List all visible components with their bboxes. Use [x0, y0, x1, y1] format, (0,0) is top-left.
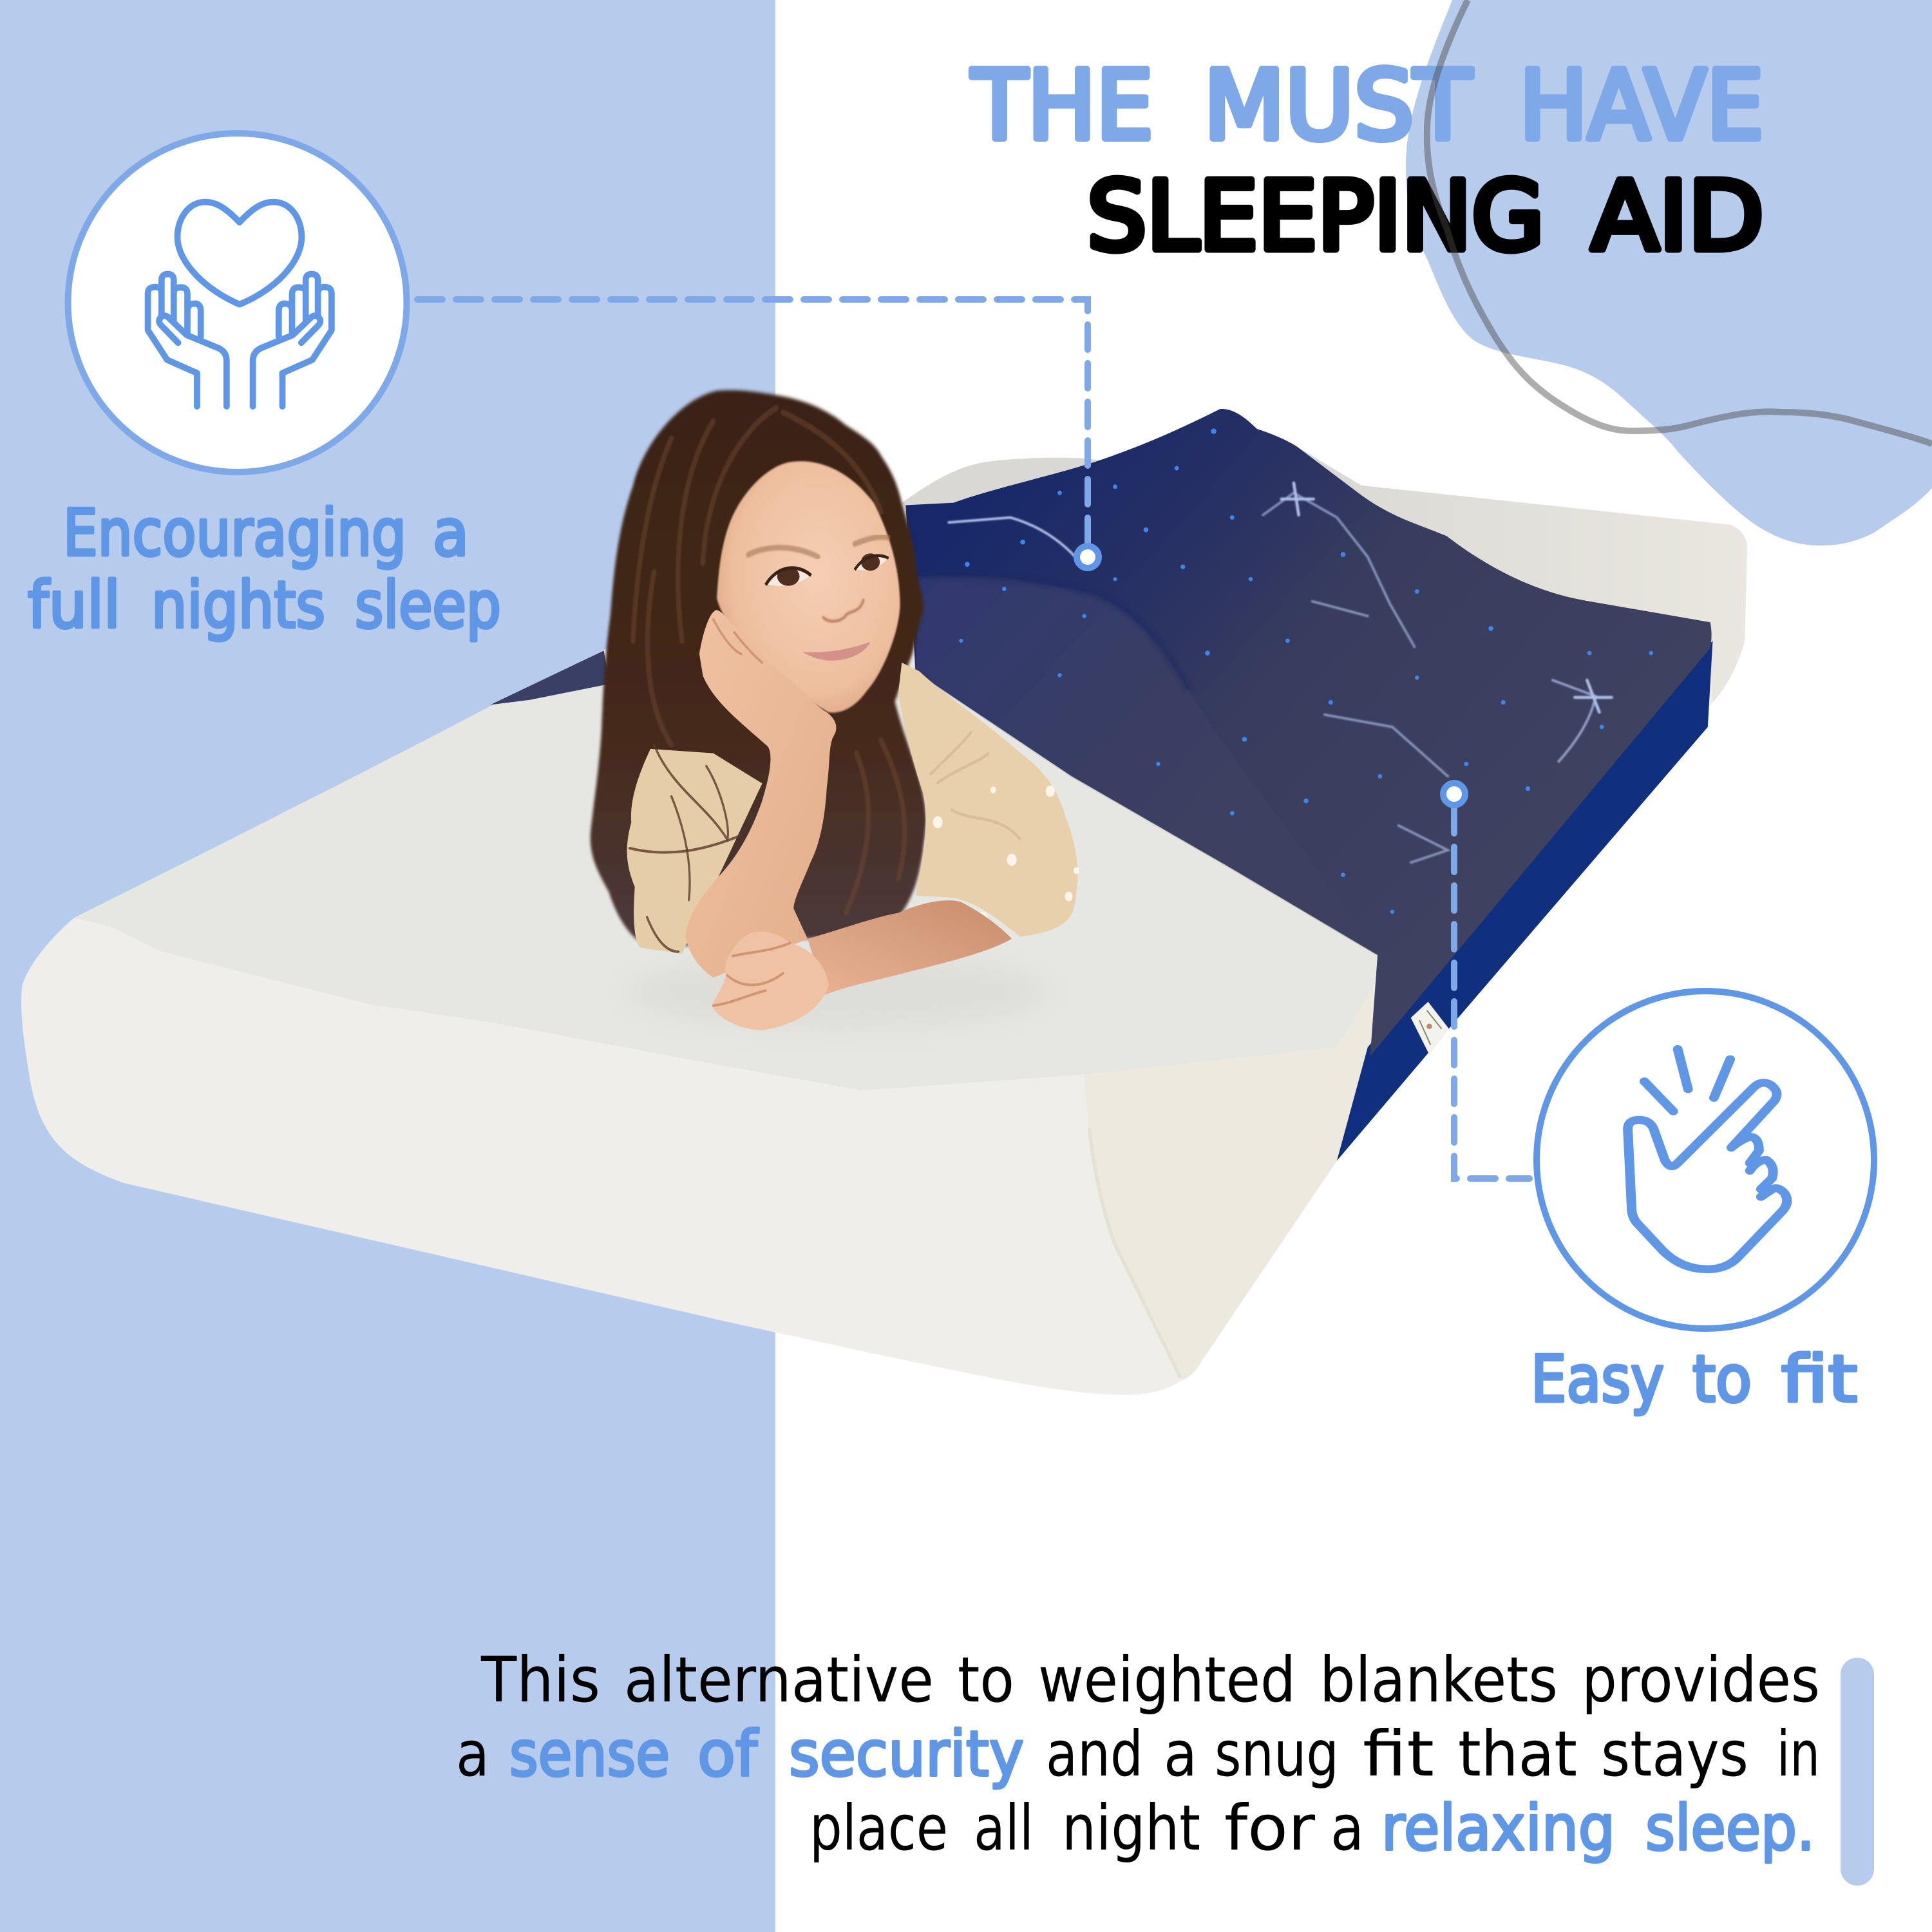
description text: place: [810, 1792, 948, 1864]
label: encouraging sleep: nights: [151, 567, 325, 643]
girl: [591, 390, 1079, 1030]
title: [971, 50, 1764, 272]
right hand: [253, 274, 332, 406]
description text: alternative: [624, 1643, 934, 1716]
description text: night: [1062, 1792, 1200, 1864]
connector: blanket to easy-fit icon: [1443, 783, 1530, 1179]
title line 1: [971, 50, 1764, 161]
forearm right: [808, 900, 1012, 995]
title line 2: SLEEPING: [1087, 161, 1544, 272]
description text: [456, 1643, 1820, 1864]
mattress top surface: [74, 653, 1378, 1090]
description text: sleep.: [1645, 1792, 1815, 1864]
constellations: [949, 483, 1612, 862]
title line 1: MUST: [1204, 50, 1472, 161]
icon circle: heart and hands: [68, 133, 407, 472]
label: encouraging sleep: a: [433, 495, 469, 571]
mattress back right edge: [1282, 437, 1747, 703]
connector dot top: [1077, 546, 1099, 568]
title line 2: [1087, 161, 1764, 272]
mattress corner seam: [1089, 1128, 1180, 1378]
blanket fold: [916, 576, 1378, 955]
title line 1: HAVE: [1519, 50, 1764, 161]
care label: [1411, 1002, 1449, 1055]
blouse right sleeve: [898, 663, 1077, 936]
description text: of: [697, 1718, 759, 1790]
description text: provides: [1582, 1643, 1820, 1716]
decorative curve line: [1427, 0, 1932, 444]
eye right: [855, 553, 889, 571]
description text: that: [1458, 1718, 1577, 1790]
blanket left flap: [490, 650, 610, 705]
blanket main: [905, 409, 1712, 1056]
connector: heart icon to blanket: [417, 299, 1099, 568]
connector dot lower: [1443, 783, 1465, 805]
description text: fit: [1363, 1718, 1434, 1790]
description text: snug: [1215, 1718, 1339, 1790]
icon: heart in hands: [148, 202, 332, 406]
mattress back left edge: [902, 458, 1105, 507]
blouse folds: [930, 732, 1021, 840]
mouth: [802, 642, 871, 661]
eyebrows: [748, 537, 888, 557]
description text: stays: [1601, 1718, 1748, 1790]
description text: a: [1164, 1718, 1197, 1790]
clasped hand: [712, 931, 828, 1030]
mattress with blanket: [21, 409, 1747, 1395]
label: easy to fit: to: [1692, 1341, 1752, 1417]
label: easy to fit: [1531, 1341, 1857, 1417]
hair back: [591, 390, 926, 947]
icon: finger snap: [1628, 1049, 1787, 1269]
blanket fold highlight: [918, 576, 1189, 690]
panel: left blue background: [0, 0, 775, 1932]
mattress body: [21, 458, 1747, 1395]
description text: in: [1777, 1718, 1820, 1790]
accent bar: [1841, 1658, 1874, 1886]
description text: to: [958, 1643, 1014, 1716]
description text: and: [1046, 1718, 1143, 1790]
label: easy to fit: fit: [1781, 1341, 1857, 1417]
snap rays: [1644, 1049, 1730, 1112]
mattress right face: [1084, 986, 1374, 1380]
hair highlights: [633, 408, 905, 913]
description text: security: [789, 1718, 1024, 1790]
heart: [178, 202, 301, 305]
description text: for: [1224, 1792, 1315, 1864]
description text: sense: [509, 1718, 670, 1790]
eye left: [766, 567, 811, 586]
description text: all: [974, 1792, 1034, 1864]
description text: a: [1331, 1792, 1364, 1864]
label: encouraging sleep: full: [28, 567, 120, 643]
left hand: [148, 274, 227, 406]
description text: a: [456, 1718, 489, 1790]
title line 2: AID: [1591, 161, 1764, 272]
arm with cheek hand: [685, 610, 836, 978]
nose: [823, 600, 864, 621]
decorative blob top right: [1406, 0, 1932, 545]
description text: blankets: [1320, 1643, 1558, 1716]
label: encouraging sleep: [28, 495, 501, 643]
pearls: [933, 786, 1079, 923]
label: encouraging sleep: sleep: [355, 567, 501, 643]
icon circle: easy fit: [1537, 991, 1874, 1329]
description text: This: [480, 1643, 600, 1716]
blanket stars: [959, 428, 1653, 914]
fingers: [714, 620, 790, 1006]
label: encouraging sleep: Encouraging: [63, 495, 406, 571]
girl contact shadow: [629, 955, 1047, 1029]
blouse left sleeve: [627, 749, 762, 954]
label: easy to fit: Easy: [1531, 1341, 1664, 1417]
hair strands over blouse: [630, 744, 741, 952]
description text: relaxing: [1381, 1792, 1615, 1864]
face: [717, 461, 900, 712]
title line 1: THE: [971, 50, 1153, 161]
description text: weighted: [1038, 1643, 1296, 1716]
blanket side strip: [1337, 641, 1712, 1160]
